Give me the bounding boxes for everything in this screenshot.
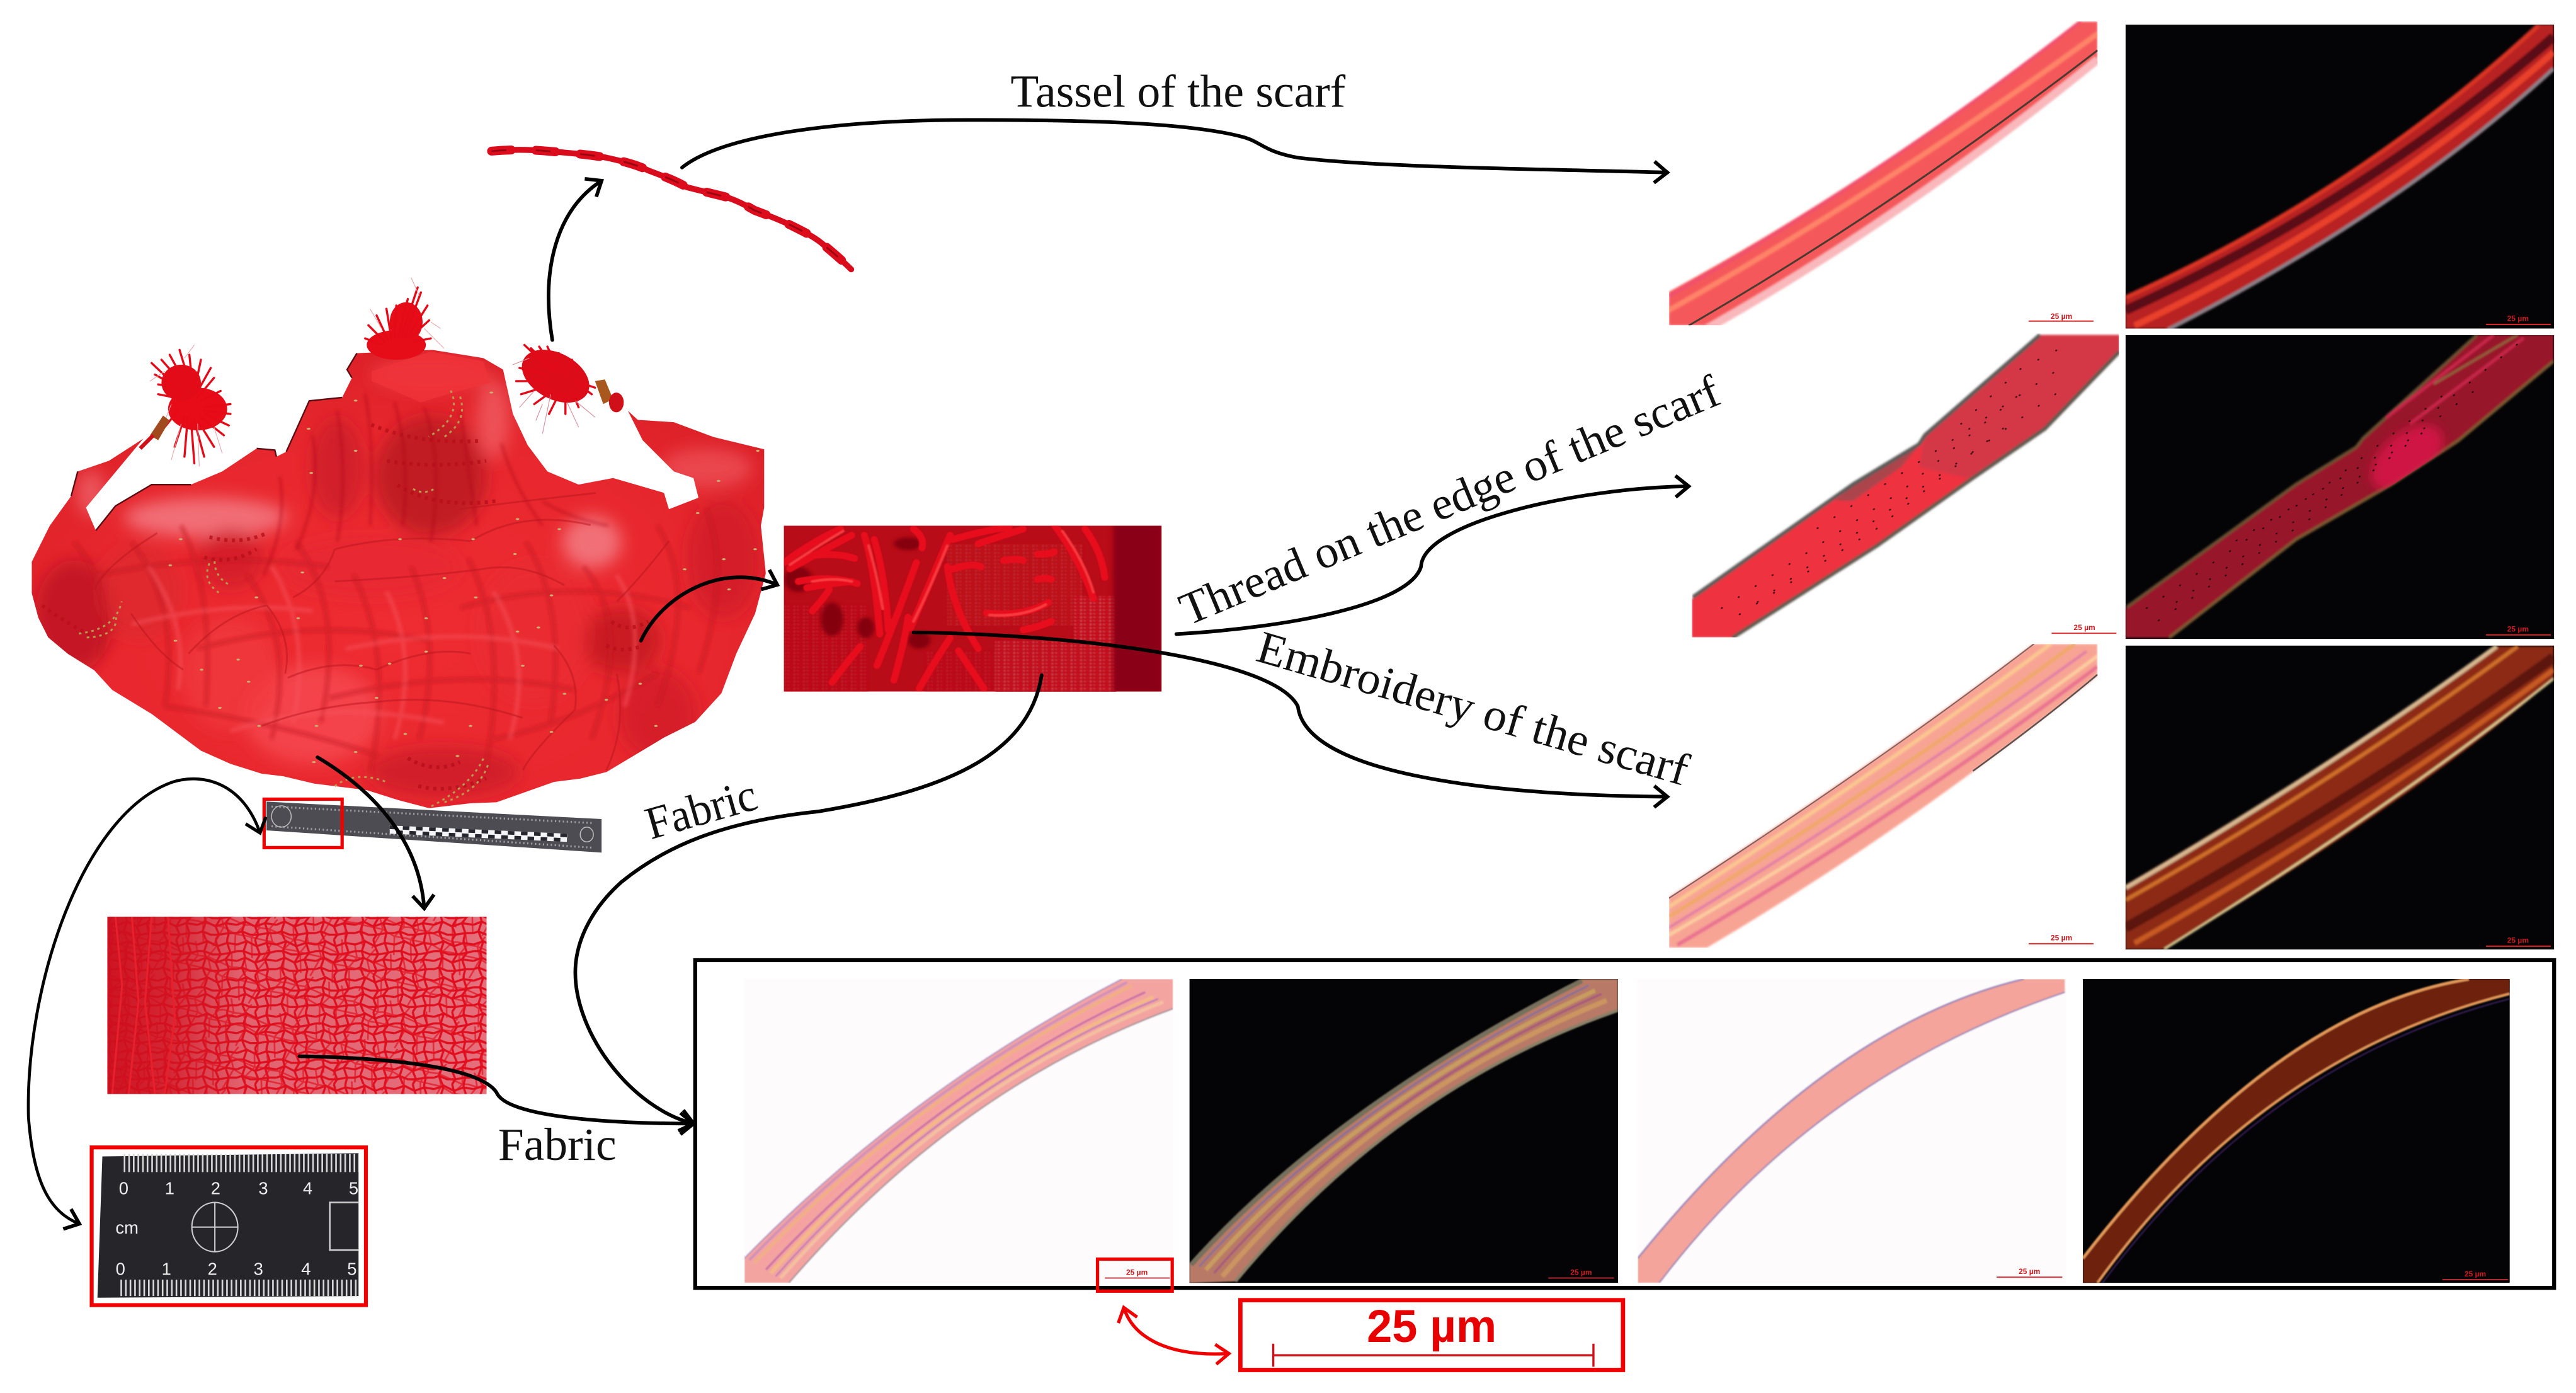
embroidery close-up photograph: [784, 524, 1163, 693]
label: fabric rotated: Fabric: [639, 769, 763, 849]
label: fabric horizontal: Fabric: [498, 1119, 617, 1170]
scale bar: [2486, 936, 2551, 946]
arrow: embroidery to embroidery micrographs: [914, 633, 1667, 797]
micrograph: fabric 2 bright field: [1638, 979, 2066, 1283]
scale bar: [2051, 623, 2116, 633]
ruler upper numbers: 1: [165, 1179, 174, 1198]
arrow: embroidery close-up to fabric frame: [575, 675, 1042, 1123]
microscope panel: tassel dark field: [2126, 25, 2554, 330]
scale bar: [1105, 1268, 1170, 1278]
ruler bottom ticks: [120, 1285, 358, 1291]
microscope panel: edge thread bright field: [1692, 333, 2119, 638]
satin embroidery stitches: [784, 525, 1105, 689]
enlarged scale bar callout: [1240, 1300, 1623, 1370]
gold bead stitches: [79, 391, 489, 806]
panel: fabric micrographs frame: [695, 960, 2554, 1288]
left tassel of the scarf: [140, 345, 231, 466]
enlarged scale bar callout: 25 µm: [1367, 1301, 1496, 1352]
ruler lower numbers: 0: [116, 1259, 125, 1278]
lace net texture: [784, 544, 1116, 693]
ruler upper numbers: 3: [258, 1179, 268, 1198]
label: thread on the edge of the scarf: Thread on the edge of the scarf: [1172, 365, 1727, 635]
hood fold: [372, 352, 490, 403]
scale bar: 25 µm: [2507, 314, 2529, 323]
label: tassel of the scarf: Tassel of the scarf: [1010, 66, 1346, 117]
ruler lower numbers: 4: [301, 1259, 311, 1278]
vertical folds: [263, 394, 608, 575]
twisted red tassel cord: [491, 150, 851, 270]
ruler upper numbers: 0: [119, 1179, 128, 1198]
scale bar: 25 µm: [2051, 312, 2072, 321]
scale bar: [2486, 314, 2551, 324]
cm ruler close-up in red frame: [92, 1147, 366, 1305]
sequin dots: [168, 391, 760, 763]
scale bar: 25 µm: [1126, 1268, 1148, 1276]
scale bar: 25 µm: [2051, 934, 2072, 943]
left dense mesh threads: [112, 917, 174, 1094]
ruler upper numbers: 4: [303, 1179, 312, 1198]
ruler lower numbers: 1: [162, 1259, 171, 1278]
scale bar: [1548, 1268, 1614, 1278]
fabric creases: [94, 493, 669, 770]
red highlight box on scale bar: [1098, 1259, 1172, 1291]
microscope panel: embroidery dark field: [2126, 646, 2554, 949]
label: embroidery of the scarf: Embroidery of the scarf: [1251, 621, 1695, 796]
ruler unit label: cm: [115, 1218, 139, 1237]
ruler lower numbers: 5: [347, 1259, 356, 1278]
middle tassel of the scarf: [365, 278, 444, 360]
ruler upper numbers: 2: [211, 1179, 220, 1198]
dark hem lines: [71, 353, 357, 530]
shaded recesses: [784, 537, 930, 649]
ruler crosshair circle: [192, 1203, 238, 1252]
arrow: scarf to tassel cord: [549, 181, 601, 340]
red scarf photograph: [25, 278, 772, 813]
arrow: embroidery to thread micrographs: [1177, 486, 1689, 634]
scarf body: [25, 345, 772, 813]
ruler upper numbers: [119, 1179, 358, 1198]
scale bar: [1997, 1267, 2062, 1277]
arrow: scarf to mesh close-up: [317, 757, 425, 909]
embroidered patches: [42, 425, 648, 789]
long scale ruler below the scarf: [266, 801, 601, 852]
scale bar: 25 µm: [2507, 936, 2529, 945]
soft crumple shading: [74, 509, 717, 772]
left strap cord: [140, 435, 153, 449]
scale bar: 25 µm: [1570, 1268, 1592, 1276]
right tassel of the scarf: [513, 339, 624, 433]
microscope panel: tassel bright field: [1669, 21, 2097, 330]
arrow: mesh close-up to fabric frame: [299, 1057, 693, 1123]
microscope panel: embroidery bright field: [1669, 644, 2097, 948]
arrow: tassel cord to tassel micrographs: [682, 120, 1667, 173]
scale bar: [2442, 1270, 2508, 1280]
tassel beads: [150, 416, 169, 440]
ruler lower numbers: 2: [208, 1259, 217, 1278]
arrow: ruler box to ruler close-up: [28, 779, 260, 1224]
scale bar: [2029, 312, 2094, 321]
mesh fabric close-up photograph: [107, 917, 487, 1094]
scale bar: [2029, 934, 2094, 944]
micrograph: fabric 2 dark field: [2083, 979, 2510, 1283]
micrograph: fabric 1 bright field: [744, 979, 1173, 1283]
red selection box on long ruler: [264, 799, 342, 847]
tassel beads: [595, 379, 613, 404]
micrograph: fabric 1 dark field: [1190, 979, 1618, 1283]
scale bar: 25 µm: [2019, 1267, 2040, 1276]
dark scalloped border band: [1113, 524, 1163, 692]
scale bar: 25 µm: [2073, 623, 2095, 632]
ruler lower numbers: [116, 1259, 356, 1278]
ruler lower numbers: 3: [254, 1259, 263, 1278]
arrow: scarf to embroidery close-up: [641, 577, 777, 641]
ruler square mark: [330, 1203, 358, 1250]
microscope panel: edge thread dark field: [2126, 335, 2554, 639]
scale bar: [2486, 625, 2551, 635]
red double-headed arrow: [1124, 1307, 1229, 1354]
ruler upper numbers: 5: [349, 1179, 358, 1198]
ruler top ticks: [123, 1159, 358, 1166]
scale bar: 25 µm: [2507, 625, 2529, 634]
scale bar: 25 µm: [2465, 1270, 2486, 1278]
